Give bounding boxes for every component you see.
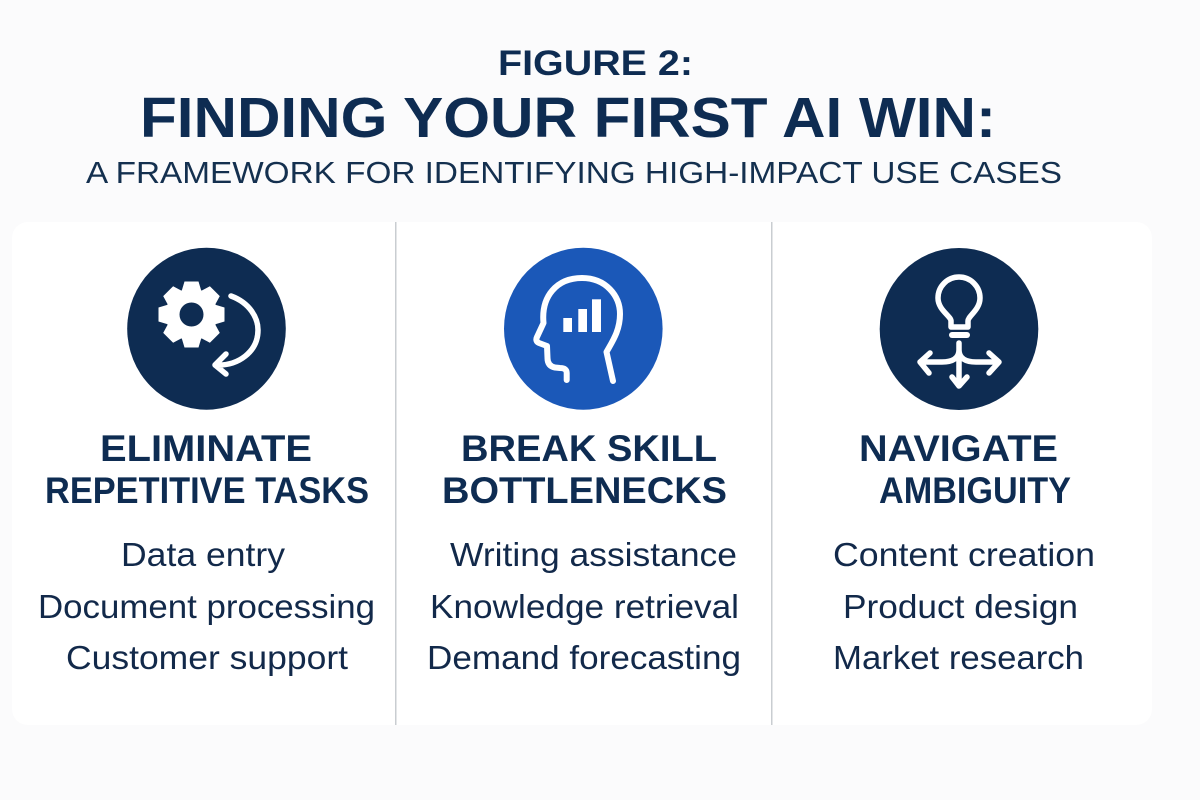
title block — [86, 44, 1062, 190]
list: Data entry — [121, 536, 286, 573]
heading — [45, 428, 369, 511]
list: Knowledge retrieval — [430, 588, 739, 625]
icon: gear with return arrow — [127, 248, 286, 410]
list: Product design — [843, 588, 1078, 625]
icon: head with bar chart — [504, 248, 663, 410]
list: Content creation — [833, 536, 1095, 573]
heading: BREAK SKILL — [461, 428, 717, 469]
list: Demand forecasting — [427, 639, 741, 676]
heading — [859, 428, 1071, 511]
list — [38, 536, 375, 676]
heading: AMBIGUITY — [879, 470, 1071, 511]
list: Writing assistance — [450, 536, 737, 573]
panel: break skill bottlenecks — [427, 248, 741, 676]
subtitle: A FRAMEWORK FOR IDENTIFYING HIGH-IMPACT USE CASES — [86, 155, 1062, 190]
list — [427, 536, 741, 676]
main title: FINDING YOUR FIRST AI WIN: — [140, 86, 996, 150]
divider left — [395, 222, 396, 725]
list: Document processing — [38, 588, 375, 625]
list — [833, 536, 1095, 676]
heading: NAVIGATE — [859, 428, 1058, 469]
list: Market research — [833, 639, 1084, 676]
heading — [442, 428, 727, 511]
panel: eliminate repetitive tasks — [38, 248, 375, 676]
list: Customer support — [66, 639, 348, 676]
heading: ELIMINATE — [100, 428, 312, 469]
panel: card background — [12, 222, 1152, 725]
heading: BOTTLENECKS — [442, 470, 727, 511]
panel: navigate ambiguity — [833, 248, 1095, 676]
heading: REPETITIVE TASKS — [45, 470, 369, 511]
divider right — [771, 222, 772, 725]
icon: light bulb with branching arrows — [880, 248, 1038, 410]
figure label: FIGURE 2: — [498, 44, 693, 83]
